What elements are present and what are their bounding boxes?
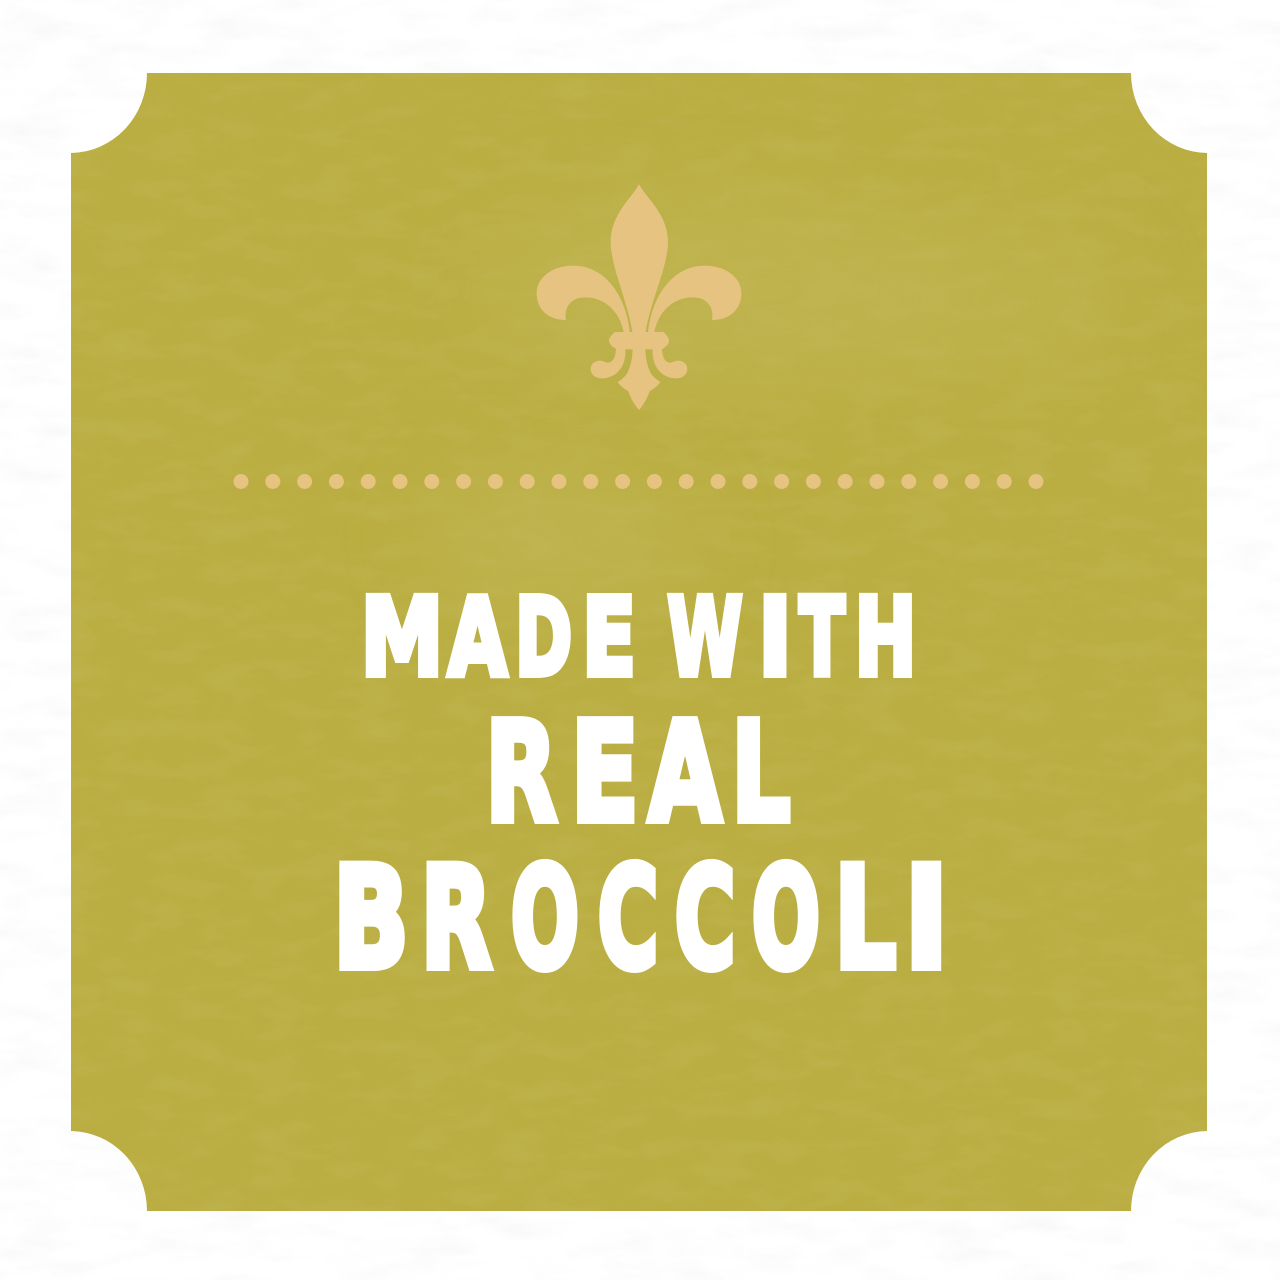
heading line: MADE WITH: I <box>758 576 792 700</box>
heading line: MADE WITH: D <box>515 576 572 700</box>
heading line: BROCCOLI: L <box>835 838 896 1000</box>
heading line: BROCCOLI: I <box>905 838 948 1000</box>
heading line: MADE WITH: M <box>361 576 443 700</box>
icon: fleur-de-lis <box>537 184 741 410</box>
heading line: BROCCOLI: B <box>334 838 408 1000</box>
heading line: MADE WITH: H <box>855 576 916 700</box>
heading line: REAL: L <box>732 694 790 853</box>
heading line: REAL: A <box>648 694 722 853</box>
dotted divider <box>234 474 1044 489</box>
heading line: REAL: R <box>486 694 557 853</box>
heading line: BROCCOLI: C <box>598 838 658 1000</box>
heading line: BROCCOLI: O <box>752 838 820 1000</box>
panel: olive ticket-shaped badge <box>70 73 1208 1211</box>
heading line: MADE WITH: T <box>799 576 845 700</box>
heading line: MADE WITH: A <box>448 576 507 700</box>
heading line: REAL: E <box>571 694 639 853</box>
heading line: MADE WITH: W <box>668 576 742 700</box>
heading line: BROCCOLI: O <box>511 838 579 1000</box>
heading: made with real broccoli <box>334 576 948 1000</box>
heading line: BROCCOLI: R <box>421 838 492 1000</box>
heading line: BROCCOLI: C <box>675 838 735 1000</box>
heading line: MADE WITH: E <box>582 576 636 700</box>
